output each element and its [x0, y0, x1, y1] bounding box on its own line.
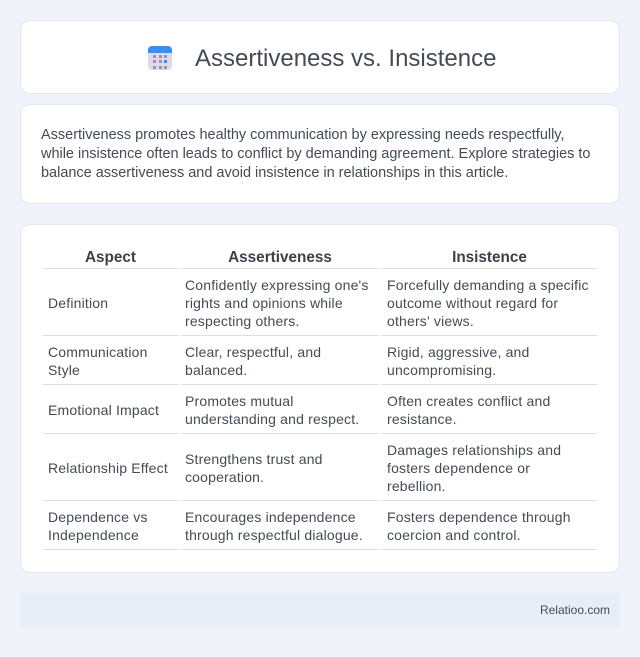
row: Communication Style: uncompromising.: [387, 362, 496, 378]
row: Dependence vs Independence: Independence: [48, 527, 139, 543]
row: Definition: rights and opinions while: [185, 295, 343, 311]
row: Definition: [48, 277, 589, 329]
row: Dependence vs Independence: Dependence vs: [48, 509, 148, 525]
table header: Aspect: [85, 249, 136, 266]
row: Communication Style: Clear, respectful, and: [185, 344, 321, 360]
row: Emotional Impact: understanding and respect.: [185, 411, 359, 427]
text block: introduction: balance assertiveness and avoid insistence in relationships in this article.: [41, 165, 508, 181]
row: Relationship Effect: Damages relationships and: [387, 442, 561, 458]
row: Relationship Effect: Strengthens trust and: [185, 451, 323, 467]
table header: [85, 249, 527, 266]
panel: comparison table: [20, 224, 620, 573]
row: Communication Style: Communication: [48, 344, 148, 360]
row: Dependence vs Independence: coercion and control.: [387, 527, 521, 543]
row: Relationship Effect: Relationship Effect: [48, 460, 168, 476]
text block: introduction: Assertiveness promotes healthy communication by expressing needs respectfully,: [41, 127, 564, 143]
row: Emotional Impact: Promotes mutual: [185, 393, 294, 409]
icon: calendar: [148, 46, 172, 70]
text block: introduction: [41, 127, 590, 181]
row: Relationship Effect: rebellion.: [387, 478, 446, 494]
row: Definition: Definition: [48, 295, 108, 311]
text block: introduction: while insistence often leads to conflict by demanding agreement. Explore strategies to: [41, 146, 590, 162]
row: Relationship Effect: fosters dependence or: [387, 460, 530, 476]
row: Communication Style: [48, 344, 529, 378]
row: Emotional Impact: [48, 393, 550, 427]
table header: Assertiveness: [228, 249, 332, 266]
footer bar: [20, 593, 620, 627]
panel: introduction text: [20, 104, 620, 204]
row: Emotional Impact: Emotional Impact: [48, 402, 159, 418]
title: Assertiveness vs. Insistence: [195, 45, 496, 72]
row: Communication Style: Rigid, aggressive, and: [387, 344, 529, 360]
row: Communication Style: balanced.: [185, 362, 247, 378]
row: Communication Style: Style: [48, 362, 80, 378]
row: Relationship Effect: [48, 442, 561, 494]
row: Dependence vs Independence: Fosters dependence through: [387, 509, 571, 525]
row: Dependence vs Independence: through respectful dialogue.: [185, 527, 363, 543]
row: Relationship Effect: cooperation.: [185, 469, 264, 485]
row: Definition: Forcefully demanding a specific: [387, 277, 589, 293]
table header: Insistence: [452, 249, 527, 266]
row: Definition: Confidently expressing one's: [185, 277, 369, 293]
panel: title card: [20, 20, 620, 94]
row: Definition: outcome without regard for: [387, 295, 558, 311]
row: Dependence vs Independence: [48, 509, 571, 543]
row: Emotional Impact: Often creates conflict and: [387, 393, 550, 409]
row: Emotional Impact: resistance.: [387, 411, 457, 427]
row: Definition: others' views.: [387, 313, 474, 329]
row: Dependence vs Independence: Encourages independence: [185, 509, 356, 525]
row: Definition: respecting others.: [185, 313, 300, 329]
footer credit: Relatioo.com: [540, 603, 610, 617]
